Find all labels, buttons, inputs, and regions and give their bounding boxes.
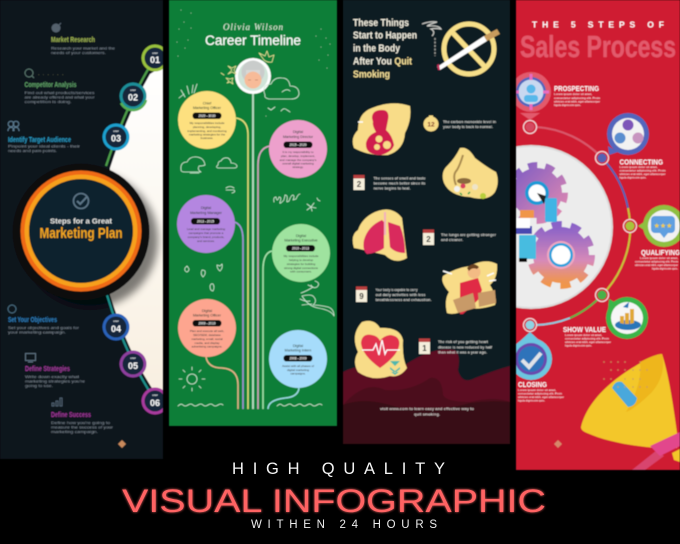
step 03: 03: [111, 134, 121, 144]
fact: 12 hours: [424, 116, 497, 132]
circle: digital marketing manager: Digital: [201, 206, 211, 210]
circle: chief marketing officer: 2020 - 3030: [198, 114, 216, 118]
circle: chief marketing officer: Marketing Officer: [193, 106, 222, 110]
fact: 12 hours: The carbon monoxide level in: [443, 119, 497, 124]
icon: no smoking: [422, 22, 500, 74]
item: set your objectives: [8, 305, 80, 334]
item: define success: Define how you're going to: [51, 420, 110, 425]
circle: digital marketing officer: [178, 299, 236, 357]
panel: career timeline: [169, 0, 337, 426]
item: competitor analysis: [24, 69, 95, 104]
step 05: [120, 350, 146, 378]
panel: quit smoking: [343, 0, 510, 444]
title: Start to Happen: [353, 30, 417, 42]
upper connector line: [104, 68, 150, 167]
blob: nose: [443, 148, 498, 199]
step: connecting: consectetur adipiscing elit. Proin: [620, 168, 666, 172]
title: Smoking: [353, 70, 390, 80]
step: prospecting: PROSPECTING: [554, 86, 599, 93]
item: define strategies: marketing strategies you're: [25, 378, 85, 384]
step: closing: ultricies erat nibh, eget ullamcorper: [518, 395, 565, 399]
circle: digital marketing manager: campaigns that promote a: [189, 231, 224, 235]
item: identify target audience: Pinpoint your ideal clients - their: [8, 144, 81, 148]
step: connecting: [596, 113, 666, 180]
headline: visual infographic: VISUAL INFOGRAPHIC: [122, 483, 546, 519]
item: define strategies: going to use.: [25, 383, 53, 388]
step: qualifying: ★★★: [654, 222, 672, 230]
circle: digital marketing executive: Marketing Executive: [284, 238, 318, 242]
blob: body silhouette: [353, 103, 410, 155]
item: define success: Define Success: [51, 412, 91, 419]
process arc: [536, 127, 630, 325]
title: [353, 18, 417, 80]
central heading: Steps for a Great: [50, 218, 113, 226]
footer text: visit www.com to learn easy and effective way to: [380, 406, 475, 411]
title: in the Body: [353, 44, 400, 54]
footer text: [380, 406, 475, 416]
fact: 9 months: breathlessness and exhaustion.: [376, 297, 432, 302]
step: closing: consectetur adipiscing elit. Proin: [518, 392, 562, 396]
dot grid: [603, 361, 648, 388]
step: show value: SHOW VALUE: [563, 327, 606, 334]
circle: digital marketing manager: Lead and manage marketing: [187, 227, 225, 231]
circle: digital marketing executive: strong digital connections: [284, 266, 318, 270]
circle: chief marketing officer: planning, developing,: [193, 125, 221, 129]
circle: digital marketing executive: [272, 224, 330, 282]
central heading: [40, 218, 122, 242]
circle: digital marketing director: plan, develop, implement,: [281, 154, 315, 158]
headline: within 24 hours: WITHEN 24 HOURS: [251, 519, 437, 531]
title: THE 5 STEPS OF: [532, 20, 664, 30]
circle: digital marketing director: strategy.: [292, 165, 304, 169]
step: show value: ultricies erat nibh, eget ullamcorper: [565, 340, 612, 344]
fact: 1 year: than what it was a year ago.: [438, 350, 487, 354]
step: connecting: Lorem ipsum dolor sit amet,: [620, 165, 658, 169]
title: After You Quit: [353, 56, 413, 68]
step: prospecting: Lorem ipsum dolor sit amet,: [554, 92, 592, 96]
item: competitor analysis: Find out what products/services: [24, 90, 95, 95]
circle: chief marketing officer: Chief: [203, 102, 212, 106]
circle: digital marketing intern: Assist with all phases of: [282, 364, 314, 368]
circle: chief marketing officer: business.: [201, 136, 213, 140]
item: identify target audience: needs and pain points.: [8, 148, 57, 153]
step: connecting: CONNECTING: [620, 160, 664, 166]
circle: digital marketing director: overall digital marketing: [282, 162, 314, 166]
step: closing: ligula dignissim quis.: [518, 398, 545, 402]
step: show value: Lorem ipsum dolor sit amet,: [565, 333, 602, 337]
step 02: [120, 82, 146, 110]
step 05: 05: [128, 361, 138, 371]
title: [205, 22, 301, 48]
circle: digital marketing intern: campaigns.: [290, 372, 306, 376]
item: define strategies: Write down exactly what: [25, 374, 80, 379]
timeline lines: [206, 94, 299, 409]
circle: digital marketing manager: and services.: [197, 239, 215, 243]
item: define success: measure the success of your: [51, 424, 114, 430]
step: closing: [510, 318, 565, 402]
central heading: Marketing Plan: [40, 225, 122, 242]
circle: digital marketing director: Marketing Director: [283, 135, 314, 139]
step: qualifying: [624, 205, 680, 270]
step 02: 02: [128, 92, 138, 102]
circle: digital marketing officer: 2009 - 2010: [198, 322, 216, 326]
item: market research: [51, 23, 115, 55]
diamond ornament: [118, 440, 126, 448]
item: define success: [51, 398, 114, 434]
title: Career Timeline: [205, 33, 301, 48]
item: competitor analysis: competition is doing.: [24, 99, 72, 104]
hearts doodles: [178, 264, 334, 406]
item: set your objectives: Set your objectives and goals for: [8, 325, 80, 330]
item: market research: needs of your customers.: [51, 50, 106, 55]
fact: 1 year: 1: [422, 344, 427, 353]
step 05: STEP: [130, 358, 136, 360]
step 02: STEP: [130, 90, 136, 92]
circle: digital marketing executive: My responsibilities include: [284, 254, 319, 258]
circle: digital marketing intern: digital marketing: [287, 368, 309, 372]
circle: digital marketing officer: advertising campaigns.: [192, 344, 223, 348]
item: identify target audience: Identify Target Audience: [8, 137, 71, 144]
blob: lungs: [353, 210, 407, 261]
fact: 2 days: The senses of smell and taste: [374, 176, 426, 180]
title: Olivia Wilson: [223, 22, 284, 32]
circle: digital marketing officer: Plan and execute all web,: [190, 329, 224, 333]
step 03: [102, 124, 130, 150]
item: competitor analysis: Competitor Analysis: [24, 82, 77, 89]
fact: 9 months: out daily activities with less: [376, 292, 426, 297]
step 04: STEP: [113, 321, 119, 323]
fact: 2 weeks: The lungs are getting stronger: [441, 232, 496, 237]
doodles: [179, 51, 320, 211]
blob: man carrying box: [442, 261, 497, 314]
item: competitor analysis: are already offered and what your: [24, 94, 95, 100]
title: These Things: [353, 18, 409, 29]
headline: high quality: HIGH QUALITY: [232, 460, 445, 478]
circle: digital marketing officer: Digital: [202, 309, 212, 313]
white curved area: [110, 66, 163, 404]
step: closing: Lorem ipsum dolor sit amet,: [518, 388, 556, 392]
circle: chief marketing officer: marketing strategies for the: [189, 132, 226, 136]
circle: digital marketing manager: company's brand, products,: [188, 235, 225, 239]
step: show value: ligula dignissim quis.: [565, 344, 592, 348]
step 06: [142, 388, 168, 414]
circle: digital marketing executive: Digital: [296, 234, 306, 238]
circle: chief marketing officer: implementing, and monitoring: [187, 129, 227, 133]
step: closing: CLOSING: [518, 382, 548, 389]
fact: 1 year: The risk of you getting heart: [438, 339, 489, 344]
circle: digital marketing manager: 2013 - 2015: [197, 220, 214, 224]
circle: digital marketing director: [269, 120, 327, 178]
item: market research: Research your market and the: [51, 46, 115, 50]
fact: 2 days: [354, 175, 426, 190]
circle: digital marketing director: and manage the company's: [280, 158, 317, 162]
circle: digital marketing officer: media, and display: [194, 341, 220, 345]
step 06: 06: [150, 398, 160, 408]
step: show value: consectetur adipiscing elit. Proin: [565, 336, 609, 340]
step 06: STEP: [152, 395, 158, 397]
fact: 2 days: nerve begins to heal.: [374, 186, 410, 190]
circle: digital marketing officer: Marketing Officer: [193, 314, 222, 318]
fact: 12 hours: your body is back to normal.: [443, 124, 493, 129]
fact: 1 year: [419, 338, 493, 354]
circle: digital marketing executive: strategies for building: [287, 262, 316, 266]
gears illustration: [510, 166, 591, 285]
item: set your objectives: your marketing campaign.: [8, 330, 66, 334]
step 04: [102, 314, 130, 340]
fact: 2 weeks: [423, 230, 496, 245]
step: connecting: ultricies erat nibh, eget ullamcorper: [620, 172, 666, 176]
circle: chief marketing officer: My responsibilities include: [190, 121, 225, 125]
step 01: [142, 44, 168, 72]
item: market research: Market Research: [51, 37, 95, 44]
circle: digital marketing manager: Marketing Manager: [190, 211, 223, 215]
fact: 9 months: [356, 286, 432, 302]
fact: 2 weeks: and cleaner.: [441, 237, 463, 242]
step: connecting: ligula dignissim quis.: [620, 176, 647, 180]
circle: digital marketing director: It is my responsibility to: [282, 150, 314, 154]
circle: digital marketing director: 2015 - 2020: [289, 143, 307, 147]
blob: heart: [355, 321, 407, 378]
item: competitor analysis: ......: [38, 71, 67, 77]
fact: 2 days: 2: [357, 180, 362, 189]
step: prospecting: [511, 72, 601, 134]
circle: digital marketing officer: SEO/SEM, database: [193, 333, 221, 337]
fact: 9 months: 9: [359, 292, 364, 301]
item: define strategies: [25, 354, 85, 388]
megaphone: [581, 354, 680, 470]
circle: digital marketing executive: 2010 - 2013: [292, 246, 309, 250]
fact: 2 days: become much better since its: [374, 180, 426, 186]
step 01: 01: [150, 55, 160, 65]
circle: digital marketing director: Digital: [293, 130, 303, 134]
bottom waves: [343, 349, 510, 444]
circle: digital marketing manager: [177, 195, 235, 253]
circle: chief marketing officer: [178, 91, 236, 149]
fact: 9 months: Your body is capable to carry: [376, 287, 418, 292]
icon: check badge: [74, 194, 88, 208]
decorative star dots: [177, 10, 330, 68]
step: show value: [563, 288, 648, 348]
white gear disc: [450, 146, 612, 308]
item: set your objectives: Set Your Objectives: [8, 317, 57, 324]
step: prospecting: ultricies erat nibh, eget ullamcorper: [554, 100, 601, 104]
footer text: quit smoking.: [414, 412, 440, 416]
avatar: [235, 58, 271, 94]
shadow under the central circle: [22, 172, 158, 308]
step 04: 04: [111, 324, 121, 334]
circle: digital marketing officer: marketing, email, social: [191, 337, 223, 341]
fact: 1 year: disease is now reduced by half: [438, 344, 493, 350]
central circle: [12, 164, 150, 300]
step: prospecting: ligula dignissim quis.: [554, 103, 581, 107]
item: identify target audience: [8, 121, 81, 153]
lower connector line: [105, 294, 150, 390]
step 03: STEP: [113, 131, 119, 133]
circle: digital marketing intern: Digital: [293, 344, 303, 348]
panel: marketing plan: [0, 0, 168, 459]
circle: digital marketing executive: with consumers.: [290, 270, 312, 274]
step 01: STEP: [152, 53, 158, 55]
panel: sales process: [450, 0, 680, 470]
item: define strategies: Define Strategies: [25, 366, 70, 373]
fact: 2 weeks: 2: [426, 235, 431, 244]
circle: digital marketing intern: 2008 - 2009: [289, 356, 307, 360]
step: prospecting: consectetur adipiscing elit. Proin: [554, 96, 600, 100]
circle: digital marketing intern: [269, 330, 327, 388]
diamond ornament: [554, 440, 562, 448]
item: define success: marketing campaign.: [51, 429, 98, 434]
circle: digital marketing intern: Marketing Intern: [285, 348, 311, 352]
fact: 12 hours: 12: [427, 122, 435, 128]
circle: digital marketing executive: helping to develop: [289, 258, 314, 262]
